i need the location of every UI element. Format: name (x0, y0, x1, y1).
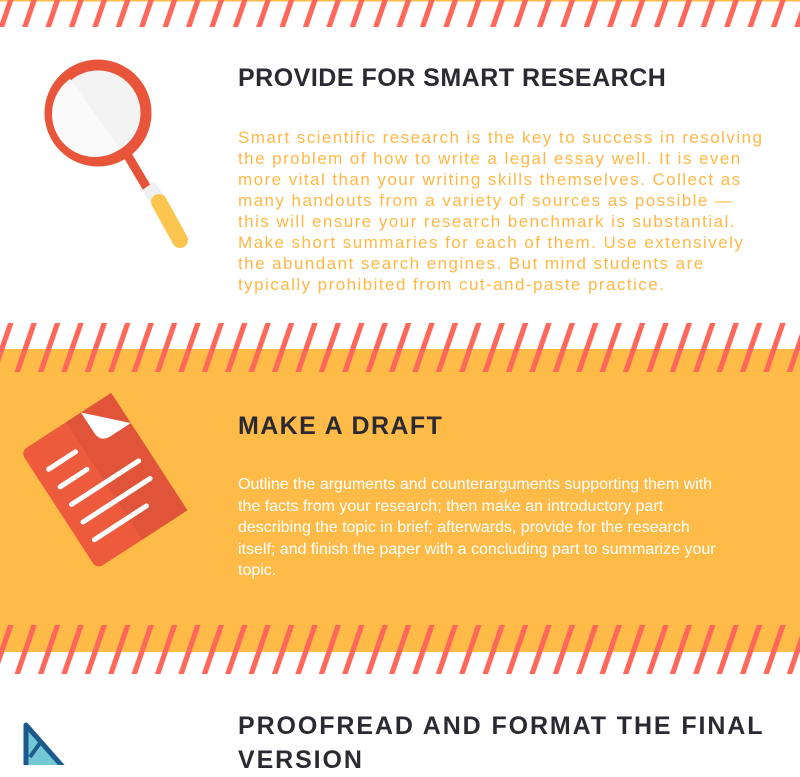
icon: magnifying glass (44, 60, 188, 248)
icon: triangle ruler (24, 722, 64, 765)
bottom stripe band (0, 625, 800, 674)
text: draft body: the facts from your research; then make an introductory part (238, 498, 663, 514)
text: research body: the problem of how to write a legal essay well. It is even (238, 149, 742, 168)
text: research body: typically prohibited from cut-and-paste practice. (238, 275, 665, 294)
text: research body: more vital than your writing skills themselves. Collect as (238, 170, 742, 189)
text: draft body: topic. (238, 562, 276, 579)
middle stripe band (0, 323, 800, 372)
text: research body: this will ensure your research benchmark is substantial. (238, 212, 736, 231)
text: research body: many handouts from a variety of sources as possible — (238, 191, 733, 210)
text: research body (238, 128, 763, 294)
text: research body: Smart scientific research is the key to success in resolving (238, 128, 763, 147)
text: draft body: Outline the arguments and counterarguments supporting them with (238, 476, 712, 493)
heading: smart research: PROVIDE FOR SMART RESEARCH (238, 64, 666, 92)
text: research body: Make short summaries for each of them. Use extensively (238, 233, 744, 252)
text: draft body: itself; and finish the paper with a concluding part to summarize your (238, 540, 716, 558)
icon: document (23, 393, 188, 566)
heading: proofread (238, 712, 764, 774)
text: draft body: describing the topic in brief; afterwards, provide for the research (238, 519, 690, 536)
panel: draft background (0, 349, 800, 652)
top stripe band (0, 0, 800, 27)
heading: make a draft: MAKE A DRAFT (238, 412, 443, 440)
text: draft body (238, 476, 716, 579)
heading: proofread: VERSION (238, 746, 364, 774)
text: research body: the abundant search engines. But mind students are (238, 254, 705, 273)
heading: proofread: PROOFREAD AND FORMAT THE FINAL (238, 712, 764, 740)
